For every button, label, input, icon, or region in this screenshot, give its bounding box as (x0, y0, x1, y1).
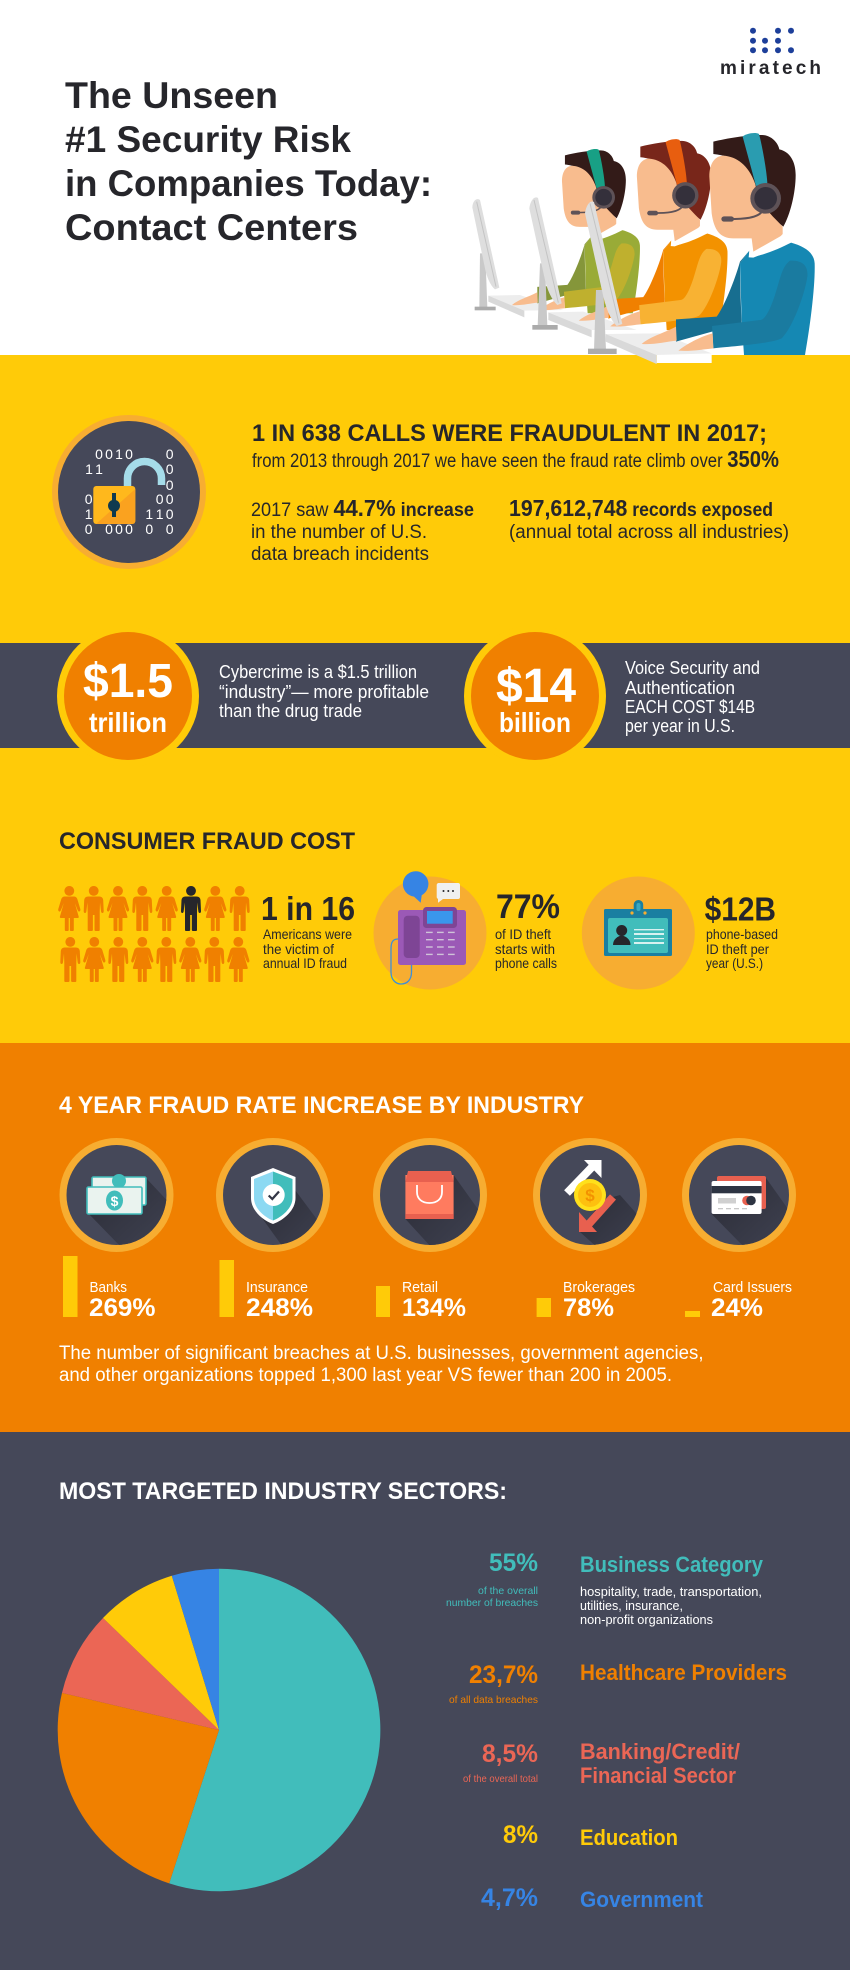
stat: 77% (495, 888, 560, 971)
icon: people pictogram, 1 in 16 (58, 886, 250, 982)
panel: yellow lower background (0, 748, 850, 1043)
icon: open padlock with binary digits: 000000 (85, 521, 174, 537)
text: voice security: Voice Security and (625, 658, 760, 678)
legend: business category 55%: hospitality, trade, transportation, (580, 1585, 762, 1599)
icon: open padlock with binary digits (52, 415, 206, 569)
legend: education 8%: 8% (503, 1821, 538, 1849)
text: cybercrime: Cybercrime is a $1.5 trillion (219, 662, 417, 682)
agent: orange sweater (579, 139, 728, 330)
pie chart (58, 1569, 380, 1891)
text: significant breaches: The number of significant breaches at U.S. businesses, government agencies, (59, 1343, 704, 1364)
stat: $12B: $12B (705, 891, 776, 928)
logo: miratech: miratech (720, 58, 821, 79)
stat: 1 in 16: annual ID fraud (263, 955, 347, 971)
icon: open padlock with binary digits: 000 (85, 491, 174, 507)
title: #1 Security Risk (65, 119, 351, 160)
bar chart: fraud increase by industry: Brokerages (563, 1279, 635, 1296)
bar chart: fraud increase by industry: Retail (402, 1279, 438, 1296)
legend: business category 55%: utilities, insurance, (580, 1599, 683, 1613)
text: voice security: per year in U.S. (625, 716, 735, 736)
icon: desk phone with speech bubbles (374, 871, 486, 990)
stat: 77%: of ID theft (495, 926, 551, 942)
legend: banking credit financial sector 8,5%: 8,5% (482, 1740, 538, 1768)
text: records exposed: 197,612,748 records exposed (509, 495, 773, 521)
badge: $1.5 trillion (57, 625, 199, 767)
icon: open padlock with binary digits: 110 (85, 461, 174, 477)
agent: green sweater (512, 149, 640, 313)
legend: education 8% (503, 1821, 678, 1850)
bar chart: fraud increase by industry: 269% (89, 1294, 156, 1322)
headline: 1 in 638 calls: 1 IN 638 CALLS WERE FRAUDULENT IN 2017; (252, 420, 767, 447)
stat: $12B (705, 891, 778, 971)
legend: banking credit financial sector 8,5%: Banking/Credit/ (580, 1739, 740, 1764)
icon: brokerages, arrows and coin: $ (585, 1186, 595, 1205)
title: The Unseen (65, 75, 278, 116)
bar chart: fraud increase by industry: Insurance (246, 1279, 308, 1296)
bar chart: fraud increase by industry: Card Issuers (713, 1279, 792, 1296)
icon: open padlock with binary digits: 1110 (85, 506, 174, 522)
stat: $12B: ID theft per (706, 941, 769, 957)
stat: 1 in 16: the victim of (263, 941, 334, 957)
legend: business category 55%: 55% (489, 1549, 538, 1577)
legend: banking credit financial sector 8,5%: Financial Sector (580, 1763, 736, 1788)
panel: consumer fraud cost (58, 828, 778, 990)
badge: $14 billion (464, 625, 606, 767)
legend: business category 55%: of the overall (478, 1585, 538, 1597)
legend: education 8%: Education (580, 1825, 678, 1850)
heading: MOST TARGETED INDUSTRY SECTORS: (59, 1478, 507, 1505)
icon: open padlock with binary digits: 00100 (95, 446, 174, 462)
panel: header (0, 0, 850, 355)
icon: banks, money: $ (111, 1193, 119, 1209)
text: records exposed: (annual total across all industries) (509, 522, 789, 543)
legend: banking credit financial sector 8,5%: of the overall total (463, 1773, 538, 1785)
stat: 1 in 16 (261, 890, 355, 971)
icon: brokerages, arrows and coin (533, 1138, 647, 1252)
headline: 1 in 638 calls: from 2013 through 2017 we have seen the fraud rate climb over 350% (252, 446, 779, 472)
text: voice security: Authentication (625, 678, 735, 698)
icon: ID badge (582, 876, 695, 990)
legend: government 4,7% (481, 1884, 704, 1912)
icon: banks, money (60, 1138, 174, 1252)
badge: $1.5 trillion: trillion (89, 707, 167, 738)
heading: 4 YEAR FRAUD RATE INCREASE BY INDUSTRY (59, 1092, 584, 1119)
text: records exposed (509, 495, 789, 543)
keyboard 3 (606, 333, 712, 364)
title: in Companies Today: (65, 163, 432, 204)
legend: healthcare providers 23,7%: of all data breaches (449, 1694, 538, 1706)
stat: $12B: phone-based (706, 926, 778, 942)
logo: miratech (720, 28, 821, 79)
title: Contact Centers (65, 207, 358, 248)
panel: fraud statistics (0, 355, 850, 643)
stat: 77%: phone calls (495, 955, 557, 971)
badge: $1.5 trillion: $1.5 (83, 655, 173, 708)
bar chart: fraud increase by industry: 248% (246, 1294, 313, 1322)
bar chart: fraud increase by industry: 134% (402, 1294, 466, 1322)
bar chart: fraud increase by industry: 24% (711, 1294, 763, 1322)
panel: fraud rate increase by industry (0, 1043, 850, 1432)
legend: business category 55% (446, 1549, 764, 1627)
legend: business category 55%: non-profit organizations (580, 1613, 713, 1627)
text: voice security (625, 658, 760, 736)
text: significant breaches: and other organizations topped 1,300 last year VS fewer than 200 in 2005. (59, 1365, 672, 1386)
legend: government 4,7%: 4,7% (481, 1884, 538, 1912)
keyboard 2 (548, 312, 637, 337)
stat: 1 in 16: 1 in 16 (261, 890, 355, 927)
legend: healthcare providers 23,7%: 23,7% (469, 1661, 538, 1689)
bar chart: fraud increase by industry: Banks (90, 1279, 127, 1296)
bar chart: fraud increase by industry (63, 1256, 792, 1322)
text: 44.7% increase in breach incidents: 2017 saw 44.7% increase (251, 495, 474, 521)
text: 44.7% increase in breach incidents: in the number of U.S. (251, 522, 427, 543)
legend: banking credit financial sector 8,5% (463, 1739, 740, 1788)
text: significant breaches (59, 1343, 704, 1386)
stat: 77%: 77% (496, 888, 560, 926)
legend: healthcare providers 23,7%: Healthcare Providers (580, 1660, 787, 1685)
legend: healthcare providers 23,7% (449, 1660, 787, 1706)
text: cybercrime: than the drug trade (219, 701, 362, 721)
title (65, 75, 432, 248)
illustration: call center agents (472, 139, 728, 354)
text: cybercrime: “industry”— more profitable (219, 682, 429, 702)
icon: open padlock with binary digits: 0 (166, 477, 174, 493)
heading: CONSUMER FRAUD COST (59, 828, 355, 855)
stat: $12B: year (U.S.) (706, 955, 763, 971)
badge: $14 billion: $14 (496, 660, 576, 713)
text: voice security: EACH COST $14B (625, 697, 755, 717)
text: 44.7% increase in breach incidents (251, 495, 474, 565)
text: cybercrime (219, 662, 429, 721)
monitor 3 (585, 201, 622, 354)
stat: 1 in 16: Americans were (263, 926, 352, 942)
text: 44.7% increase in breach incidents: data breach incidents (251, 544, 429, 565)
headline: 1 in 638 calls (252, 420, 779, 472)
agent: blue sweater (642, 133, 815, 355)
monitor 1 (472, 199, 499, 310)
panel: cost band (0, 625, 850, 767)
keyboard 1 (488, 295, 563, 317)
bar chart: fraud increase by industry: 78% (563, 1294, 614, 1322)
icon: retail, shopping bag (373, 1138, 487, 1252)
legend: business category 55%: number of breaches (446, 1597, 538, 1609)
panel: most targeted industry sectors (0, 1432, 850, 1970)
stat: 77%: starts with (495, 941, 555, 957)
badge: $14 billion: billion (499, 707, 571, 738)
icon: insurance, shield (216, 1138, 330, 1252)
icon: card issuers, credit cards (682, 1138, 796, 1252)
monitor 2 (529, 197, 562, 330)
legend: business category 55%: Business Category (580, 1552, 764, 1577)
legend: government 4,7%: Government (580, 1887, 704, 1912)
